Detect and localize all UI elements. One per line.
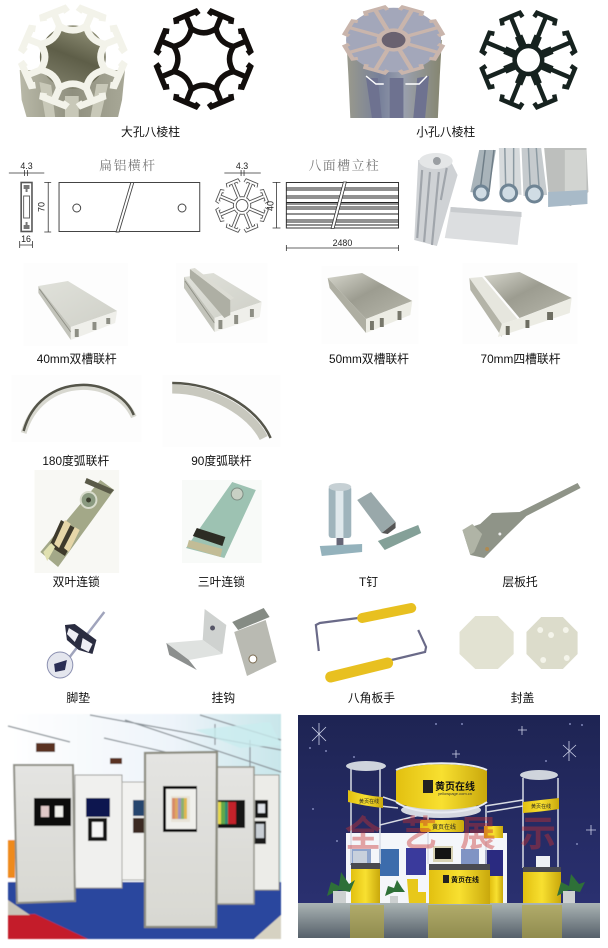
- panel C: [122, 782, 145, 880]
- panel: two-leaf lock: [34, 470, 119, 573]
- label: 70mm: 70mm四槽联杆: [481, 352, 561, 366]
- upright front view: [286, 182, 399, 228]
- section profile: [21, 182, 32, 232]
- dimension 40: 40: [266, 201, 276, 211]
- dimension 70: 70: [36, 202, 46, 212]
- label: two-leaf lock: 双叶连锁: [53, 575, 100, 589]
- panel: small-hole column photo: [330, 0, 457, 118]
- panel: 70mm four-slot connector: [462, 263, 578, 344]
- top-right profile cluster: [470, 150, 496, 195]
- dimension 4.3: [9, 161, 44, 176]
- panel D: [217, 767, 254, 904]
- column top face: [330, 0, 457, 83]
- icon: small-hole black cross-section: [468, 0, 589, 121]
- column body: [346, 40, 442, 118]
- panel: eight-slot upright drawing: [210, 158, 399, 251]
- long side: [469, 278, 502, 337]
- panel: profiles group photo: [414, 148, 588, 246]
- panel: 50mm double-slot connector: [322, 266, 418, 344]
- night sky: [298, 715, 600, 903]
- cap front: [460, 616, 514, 669]
- centre counter: 黄页在线: [451, 875, 479, 884]
- top face: [484, 272, 572, 318]
- plant left: [327, 872, 355, 903]
- label: large-hole column: 大孔八棱柱: [121, 125, 180, 139]
- end face: [71, 311, 117, 340]
- hook 2: [232, 608, 277, 676]
- panel: three-leaf lock: [182, 480, 262, 563]
- arc: [24, 387, 134, 433]
- panel B: [75, 775, 122, 888]
- small side band: [484, 826, 503, 838]
- top face: [38, 281, 117, 327]
- panel: hooks: [166, 608, 277, 676]
- plant right: [557, 874, 585, 903]
- heading: 扁铝横杆: [99, 158, 157, 173]
- central drum: yellowpage.com.cn: [438, 791, 472, 796]
- stars: [312, 723, 596, 835]
- back wall: [346, 833, 507, 903]
- ceiling trusses: [8, 715, 281, 772]
- central drum: [396, 763, 487, 812]
- label: small-hole column: 小孔八棱柱: [416, 125, 475, 139]
- dimension 40: [266, 182, 280, 228]
- dimension 4.3: 4.3: [236, 161, 248, 171]
- panel: 180-degree arc connector: [12, 375, 142, 442]
- poles and arms: [351, 768, 558, 868]
- panel E: [253, 775, 279, 890]
- bar: [445, 207, 522, 245]
- cap back: [526, 617, 578, 669]
- plate: [40, 480, 114, 567]
- watermark: 示: [520, 813, 556, 854]
- central drum: 黄页在线: [435, 780, 475, 793]
- section outline: [210, 173, 274, 238]
- nail 1: [320, 483, 362, 556]
- dimension 4.3: [224, 161, 261, 176]
- left yellow band: [348, 790, 383, 808]
- label: wrench: 八角板手: [348, 691, 395, 705]
- floor: [8, 882, 281, 939]
- centre band: [420, 820, 464, 832]
- product sections: [4, 0, 589, 705]
- watermark: [345, 813, 556, 854]
- top face: [328, 273, 412, 319]
- label: hooks: 挂钩: [212, 691, 235, 705]
- back counter: [490, 876, 503, 903]
- left canopy: [346, 761, 386, 771]
- label: foot pad: 脚垫: [66, 691, 90, 705]
- panel: shelf bracket: [462, 483, 581, 558]
- inner rail: [469, 277, 518, 324]
- label: end cap: 封盖: [511, 691, 534, 705]
- right yellow band: [523, 798, 559, 813]
- panel: exhibition partition photo: [8, 714, 281, 939]
- right yellow band: 黄页在线: [531, 803, 551, 810]
- column top face: [4, 0, 142, 123]
- label: 50mm: 50mm双槽联杆: [329, 352, 409, 366]
- dimension 16: [20, 234, 32, 248]
- dimension 16: 16: [21, 234, 31, 244]
- top face: [184, 273, 262, 318]
- chair: [407, 879, 426, 903]
- floor: [298, 903, 600, 938]
- label: shelf bracket: 层板托: [502, 575, 538, 589]
- panel: exhibition booth rendering: [298, 715, 600, 938]
- long side: [38, 286, 71, 340]
- crossbar front view: [59, 182, 200, 232]
- upright rib: [190, 269, 230, 318]
- right canopy: [520, 770, 558, 780]
- background hall: [8, 714, 281, 939]
- panel: end caps: [460, 616, 578, 669]
- column body: [20, 70, 125, 117]
- left counter: [351, 851, 380, 903]
- dimension 2480: 2480: [333, 238, 352, 248]
- panel: flat aluminium crossbar drawing: [9, 158, 200, 248]
- panel: T-rib connector: [176, 263, 268, 343]
- centre band: 黄页在线: [432, 823, 456, 831]
- centre counter: [429, 864, 490, 904]
- arc: [172, 389, 264, 438]
- label: 90-degree arc: 90度弧联杆: [191, 454, 252, 468]
- label: three-leaf lock: 三叶连锁: [198, 575, 245, 589]
- dimension 70: [36, 182, 51, 232]
- panel: T-nails: [320, 483, 421, 556]
- dimension 4.3: 4.3: [20, 161, 33, 171]
- nail 2: [357, 492, 421, 550]
- label: 40mm: 40mm双槽联杆: [37, 352, 117, 366]
- end face: [498, 298, 572, 337]
- dimension 2480: [286, 238, 399, 251]
- end face: [366, 301, 412, 333]
- hook 1: [166, 609, 226, 670]
- panel: 40mm double-slot connector: [24, 263, 128, 346]
- long side: [328, 278, 366, 333]
- panel: 90-degree arc connector: [162, 375, 280, 447]
- icon: large-hole black cross-section: [140, 0, 268, 124]
- watermark: 全: [345, 813, 381, 854]
- upright column: [414, 157, 458, 246]
- central panel: [145, 752, 217, 927]
- panel: octagon wrenches: [316, 608, 426, 677]
- panel: large-hole column photo: [4, 0, 142, 123]
- wrench 2: [331, 630, 426, 677]
- long side: [184, 277, 215, 332]
- plate: [186, 482, 256, 558]
- watermark: 艺: [401, 813, 437, 854]
- wrench 1: [316, 608, 411, 651]
- ring under drum: [401, 802, 481, 818]
- panel A: [14, 765, 75, 903]
- right counter: [523, 856, 561, 903]
- panel: foot pad: [47, 612, 104, 678]
- label: T-nail: T钉: [359, 575, 378, 589]
- left yellow band: 黄页在线: [359, 798, 379, 805]
- plant small: [385, 880, 405, 903]
- label: 180-degree arc: 180度弧联杆: [42, 454, 109, 468]
- monitor: [433, 846, 453, 862]
- end face: [215, 302, 262, 332]
- watermark: 展: [460, 813, 496, 854]
- heading: 八面槽立柱: [309, 158, 380, 173]
